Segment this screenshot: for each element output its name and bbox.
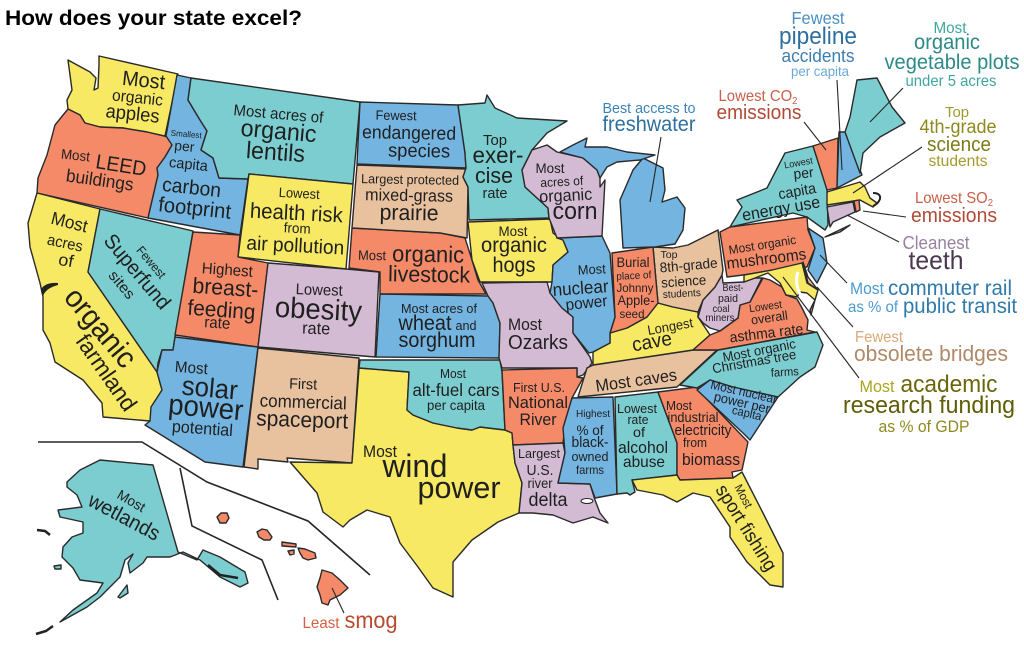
callout: academic research funding: academic xyxy=(900,371,998,398)
state: Arizona: solar xyxy=(181,371,239,405)
state: Colorado: obesity xyxy=(274,292,363,328)
state: Mississippi: owned xyxy=(572,449,608,464)
state: Louisiana: Largest xyxy=(518,446,560,461)
state: Oklahoma: per capita xyxy=(427,397,485,413)
state: North Carolina xyxy=(680,332,823,397)
state: California: acres xyxy=(46,232,85,256)
state: Nevada: sites xyxy=(105,267,138,303)
state: Nebraska: Most xyxy=(358,248,386,263)
state: New Mexico xyxy=(244,348,359,469)
state: West Virginia: Best- xyxy=(722,283,744,294)
state: Utah: breast- xyxy=(192,273,259,302)
callout: 4th-grade science xyxy=(853,105,996,193)
state: California: farmland xyxy=(71,329,142,416)
state: Florida xyxy=(632,472,783,587)
state: Alabama: abuse xyxy=(623,454,665,471)
state: Mississippi: farms xyxy=(576,463,604,477)
state: Minnesota: exer- xyxy=(472,142,524,168)
state: Minnesota: rate xyxy=(482,185,508,202)
state: Virginia eastern shore xyxy=(810,300,815,315)
state: Georgia: industrial xyxy=(668,409,718,425)
state: Indiana: Apple- xyxy=(618,293,654,308)
state: Arkansas: First U.S. xyxy=(513,380,565,395)
state: Michigan xyxy=(560,138,685,248)
state: Arizona xyxy=(145,337,258,467)
state: Iowa: Most xyxy=(498,223,528,239)
state: Minnesota: Top xyxy=(483,133,507,149)
state: Wyoming: health risk xyxy=(249,199,344,227)
state: South Dakota: mixed-grass xyxy=(365,185,453,206)
state: Nevada: Fewest xyxy=(133,243,169,282)
callout: cleanest teeth: teeth xyxy=(908,245,964,275)
state: Montana: lentils xyxy=(245,137,306,168)
callout: academic research funding: Most xyxy=(860,377,895,396)
state: Nebraska xyxy=(349,228,486,294)
state: New York xyxy=(730,146,828,230)
state: Indiana xyxy=(610,247,658,333)
callout: lowest CO2: 2 xyxy=(792,96,798,107)
state: Washington: organic xyxy=(111,86,164,110)
state: Ohio: Top xyxy=(660,249,678,261)
callout: 4th-grade science: Top xyxy=(945,105,969,121)
state: Kansas: wheat xyxy=(398,312,452,335)
state: Wyoming: Lowest xyxy=(278,185,320,202)
state: South Carolina: power per xyxy=(713,389,772,416)
state: Oregon xyxy=(37,109,172,218)
state: Idaho: carbon xyxy=(161,174,222,202)
callout: pipeline: accidents xyxy=(782,46,854,66)
state: Alaska xyxy=(36,460,248,634)
state: Wyoming xyxy=(238,174,353,269)
state: California: Most xyxy=(49,208,90,236)
state: North Dakota xyxy=(357,102,466,168)
state: Arizona: potential xyxy=(171,417,233,440)
state: Oregon: buildings xyxy=(65,165,135,195)
state: South Dakota xyxy=(352,165,468,238)
state: Idaho: capita xyxy=(168,154,209,175)
callout: lowest CO2: Lowest CO xyxy=(718,88,796,105)
state: West Virginia: miners xyxy=(706,313,734,324)
state: Oregon: Most xyxy=(60,146,91,165)
state: Kansas: sorghum xyxy=(398,329,476,352)
state: Kentucky xyxy=(593,303,710,365)
state: Ohio: students xyxy=(663,287,701,301)
state: Minnesota xyxy=(458,95,567,220)
state: Texas: power xyxy=(418,470,500,505)
state: South Dakota: Largest protected xyxy=(361,171,459,188)
state: Wisconsin: acres of xyxy=(540,174,584,190)
state: Montana: Most acres of xyxy=(233,102,325,127)
state: Texas: Most xyxy=(363,443,397,461)
title: How does your state excel? xyxy=(5,7,302,30)
state: Utah xyxy=(175,232,268,347)
state: Alabama xyxy=(615,392,677,495)
state: Louisiana: delta xyxy=(528,490,568,511)
state: Utah: feeding xyxy=(187,295,256,324)
state: Indiana: place of xyxy=(616,269,652,283)
state: Arizona: Most xyxy=(174,359,209,378)
state: Pennsylvania: mushrooms xyxy=(726,246,807,273)
state: Oregon: LEED xyxy=(94,150,148,181)
state: Oklahoma xyxy=(359,360,505,430)
state: South Carolina: Most nuclear xyxy=(709,378,779,407)
state: New Jersey xyxy=(808,228,827,283)
callout: commuter rail: public transit xyxy=(903,294,1017,318)
state: Alaska: Most xyxy=(115,486,149,515)
state: South Dakota: prairie xyxy=(379,199,439,226)
state: Idaho xyxy=(148,75,248,235)
state: Kansas: and xyxy=(456,318,476,333)
state: Oklahoma: Most xyxy=(440,367,466,381)
callout: freshwater: freshwater xyxy=(602,113,696,136)
state: Mississippi: black- xyxy=(572,435,609,451)
callout: lowest CO2 xyxy=(716,88,826,150)
state: West Virginia xyxy=(698,275,762,331)
state: New York: capita xyxy=(777,180,818,203)
callout: pipeline: pipeline xyxy=(779,24,857,50)
state: Idaho: Smallest xyxy=(170,128,203,140)
state: New York: Lowest xyxy=(783,156,814,171)
state: Tennessee xyxy=(578,350,717,397)
state: Kansas xyxy=(376,294,500,358)
state: Alabama: of xyxy=(633,424,645,440)
state: Hawaii xyxy=(217,513,348,605)
state: Virginia: asthma rate xyxy=(729,322,804,346)
state: Florida: Most xyxy=(731,482,756,511)
state: North Dakota: Fewest xyxy=(375,108,417,123)
state: California: organic xyxy=(57,281,143,375)
state: Pennsylvania xyxy=(720,217,815,277)
state: Louisiana: river xyxy=(528,476,553,491)
state: Wisconsin: corn xyxy=(552,198,598,225)
state: Arkansas xyxy=(502,368,583,445)
callout: cleanest teeth: Cleanest xyxy=(902,233,970,253)
state: Rhode Island xyxy=(854,200,860,212)
callout: lowest SO2: Lowest SO xyxy=(915,190,991,207)
state: Georgia: from xyxy=(683,436,707,450)
state: North Carolina: farms xyxy=(770,364,799,380)
state: Washington: Most xyxy=(121,67,166,94)
state: Illinois: power xyxy=(565,293,609,314)
state: California: of xyxy=(57,250,75,271)
state: North Dakota: species xyxy=(388,140,450,163)
state: Connecticut xyxy=(827,202,855,227)
state: New Mexico: commercial xyxy=(259,390,347,414)
callout: lowest SO2 xyxy=(863,190,997,227)
state: Utah: Highest xyxy=(201,260,254,281)
callout: vegetable plots xyxy=(870,20,1020,122)
state: Iowa: hogs xyxy=(492,254,536,277)
state: Alabama: Lowest xyxy=(617,401,657,416)
state: Georgia: Most xyxy=(666,399,692,413)
state: Washington: apples xyxy=(105,101,161,128)
state: Missouri: Most xyxy=(508,316,542,334)
callout: least smog: Least xyxy=(302,615,340,632)
state: Texas xyxy=(290,368,522,597)
callout: vegetable plots: under 5 acres xyxy=(906,73,997,90)
callout: least smog: smog xyxy=(344,607,398,633)
state: New Hampshire xyxy=(837,132,862,188)
state: Maryland xyxy=(744,263,818,308)
state: Vermont xyxy=(813,138,838,190)
state: Louisiana: U.S. xyxy=(526,463,554,479)
callout: commuter rail xyxy=(820,255,1017,318)
callout: freshwater: Best access to xyxy=(602,100,696,117)
state: Montana xyxy=(188,78,360,184)
state: North Dakota: endangered xyxy=(362,121,456,144)
callout: commuter rail: as % of xyxy=(848,299,899,316)
callout: vegetable plots: organic xyxy=(914,31,980,54)
state: Kentucky: Longest xyxy=(646,315,694,338)
state: West Virginia: paid xyxy=(718,293,738,305)
state: Georgia: biomass xyxy=(682,451,740,469)
inset dividers xyxy=(38,442,370,600)
callout: obsolete bridges: obsolete bridges xyxy=(854,341,1008,366)
state: Georgia xyxy=(658,387,748,480)
state: Idaho: footprint xyxy=(157,193,232,224)
state: Maine xyxy=(845,78,905,173)
state: Oklahoma: alt-fuel cars xyxy=(412,380,500,400)
state: Florida: sport fishing xyxy=(711,481,781,575)
callout: freshwater xyxy=(602,100,696,202)
callout: academic research funding: research funding xyxy=(843,392,1015,419)
state: Alabama: rate xyxy=(628,412,648,427)
state: Kansas: Most acres of xyxy=(401,301,477,316)
state: Idaho: per xyxy=(174,137,195,155)
callout: 4th-grade science: students xyxy=(928,153,988,170)
state: Massachusetts xyxy=(827,182,880,207)
state: Indiana: Burial xyxy=(616,255,650,270)
state: Arkansas: National xyxy=(508,393,568,412)
state: Arkansas: River xyxy=(520,410,557,429)
state: Wyoming: from xyxy=(283,219,311,237)
state: California xyxy=(28,193,162,421)
state: Ohio: 8th-grade xyxy=(659,255,718,276)
callout: pipeline: per capita xyxy=(791,63,849,79)
callout: vegetable plots: vegetable plots xyxy=(884,51,1020,74)
state: Georgia: electricity xyxy=(674,423,732,439)
state: Wyoming: air pollution xyxy=(246,232,345,260)
callout: commuter rail: Most xyxy=(850,280,884,298)
callout: least smog xyxy=(302,588,398,633)
callout: academic research funding xyxy=(783,277,1015,436)
state: Wisconsin: organic xyxy=(539,185,593,206)
callout: lowest SO2: emissions xyxy=(911,205,997,227)
state: Wisconsin xyxy=(522,145,605,238)
state: Mississippi: Highest xyxy=(576,408,610,420)
state: North Carolina: Christmas tree xyxy=(711,347,797,376)
callout: pipeline: Fewest xyxy=(792,8,845,28)
state: Illinois: Most xyxy=(577,261,606,278)
state: Kentucky: cave xyxy=(630,328,674,356)
state: North Carolina: Most organic xyxy=(721,336,797,365)
callout: 4th-grade science: 4th-grade xyxy=(920,117,996,138)
state: New York: per xyxy=(793,165,815,183)
callout: academic research funding: as % of GDP xyxy=(878,418,970,436)
state: Iowa xyxy=(468,219,568,282)
state: Nebraska: livestock xyxy=(388,261,471,288)
state: Tennessee: Most caves xyxy=(594,365,678,396)
callout: 4th-grade science: science xyxy=(927,134,991,156)
state: Pennsylvania: Most organic xyxy=(728,233,797,257)
state: South Carolina: capita xyxy=(731,403,763,423)
state: West Virginia: coal xyxy=(712,303,730,315)
state: Missouri xyxy=(482,282,592,377)
state: Indiana: seed xyxy=(620,307,644,321)
state: Missouri: Ozarks xyxy=(508,332,568,354)
state: Virginia: Lowest xyxy=(748,299,783,315)
callout: cleanest teeth xyxy=(847,215,970,275)
state: Mississippi xyxy=(558,397,617,498)
state: Nebraska: organic xyxy=(392,240,464,268)
callout: commuter rail: commuter rail xyxy=(888,276,1012,300)
callout: lowest SO2: 2 xyxy=(988,198,993,209)
callout: lowest CO2: emissions xyxy=(716,102,802,124)
state: New Mexico: spaceport xyxy=(256,405,349,434)
state: Illinois xyxy=(550,236,615,353)
state: Virginia xyxy=(693,278,815,350)
state: Montana: organic xyxy=(240,115,318,148)
callout: pipeline xyxy=(779,8,857,170)
state: Nevada xyxy=(88,209,193,372)
callout: vegetable plots: Most xyxy=(934,20,967,37)
state: Minnesota: cise xyxy=(475,163,513,188)
state: Utah: rate xyxy=(204,314,231,333)
state: Texas: wind xyxy=(382,448,448,484)
state: Ohio xyxy=(653,230,723,312)
state: Mississippi: % of xyxy=(576,422,604,438)
state: Ohio: science xyxy=(661,271,707,291)
state: Virginia: overall xyxy=(750,308,789,328)
state: Arizona: power xyxy=(167,389,245,427)
state: South Carolina xyxy=(697,378,779,440)
state: Wisconsin: Most xyxy=(536,160,565,176)
state: Nevada: Superfund xyxy=(99,230,175,314)
callout: obsolete bridges: Fewest xyxy=(855,329,904,346)
state: Alaska: wetlands xyxy=(83,488,164,546)
state: New Mexico: First xyxy=(289,376,318,394)
state: Colorado xyxy=(258,263,379,357)
state: Colorado: Lowest xyxy=(295,281,344,300)
state: Iowa: organic xyxy=(481,234,547,257)
state: Long Island xyxy=(825,225,850,237)
state: Indiana: Johnny xyxy=(616,281,654,295)
state: Delaware xyxy=(803,262,818,290)
callout: obsolete bridges xyxy=(817,287,1008,366)
state: Colorado: rate xyxy=(302,319,331,338)
state: New York: energy use xyxy=(740,192,822,225)
state: Washington xyxy=(67,56,178,136)
state: Illinois: nuclear xyxy=(552,276,609,300)
state: Alabama: alcohol xyxy=(618,438,668,457)
state: Louisiana xyxy=(513,443,608,523)
